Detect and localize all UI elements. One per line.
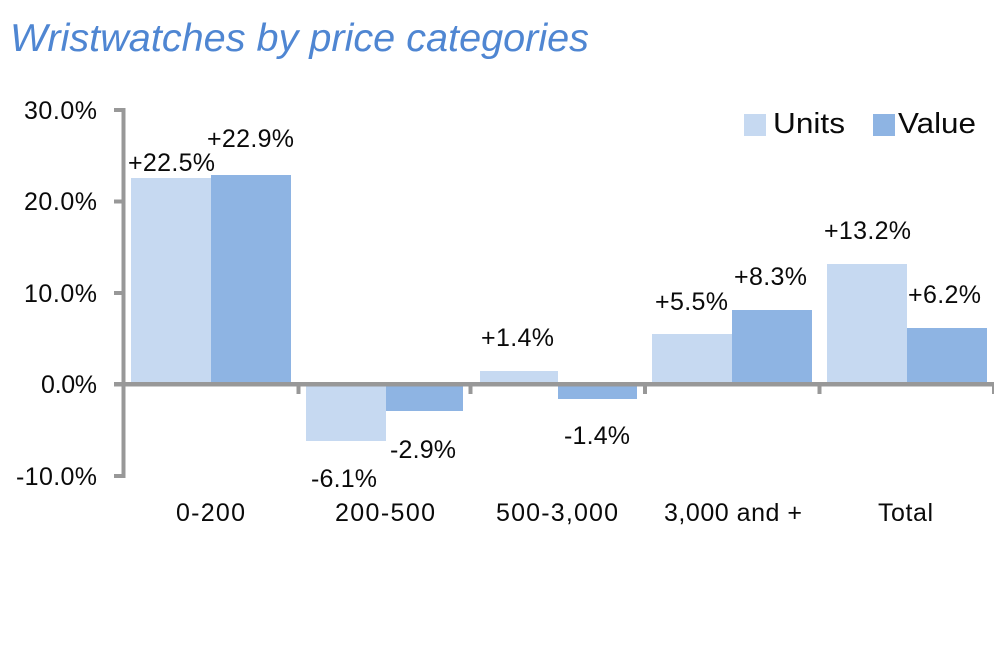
category labels: [176, 499, 933, 527]
category labels: Total: [878, 499, 933, 527]
data labels: +8.3%: [734, 263, 807, 291]
data labels: [128, 125, 981, 493]
y axis labels: 10.0%: [24, 280, 97, 308]
data labels: -1.4%: [564, 422, 630, 450]
y axis labels: 0.0%: [41, 371, 97, 399]
data labels: -2.9%: [390, 436, 456, 464]
data labels: +13.2%: [824, 217, 911, 245]
y axis labels: -10.0%: [16, 463, 97, 491]
bars: units: [131, 178, 907, 441]
data labels: +6.2%: [908, 281, 981, 309]
legend: Units: [773, 108, 845, 140]
data labels: +5.5%: [655, 288, 728, 316]
data labels: +22.5%: [128, 149, 215, 177]
data labels: +22.9%: [207, 125, 294, 153]
data labels: +1.4%: [481, 324, 554, 352]
title: Wristwatches by price categories: [10, 17, 589, 60]
axes: [114, 108, 994, 478]
category labels: 3,000 and +: [664, 499, 802, 527]
y axis labels: [16, 97, 97, 491]
category labels: 500-3,000: [496, 499, 618, 527]
legend: Value: [898, 108, 976, 140]
legend: [744, 108, 976, 140]
bar chart: [16, 97, 994, 527]
y axis labels: 30.0%: [24, 97, 97, 125]
y axis labels: 20.0%: [24, 188, 97, 216]
bars: value: [211, 175, 987, 411]
category labels: 0-200: [176, 499, 245, 527]
category labels: 200-500: [335, 499, 435, 527]
data labels: -6.1%: [311, 465, 377, 493]
